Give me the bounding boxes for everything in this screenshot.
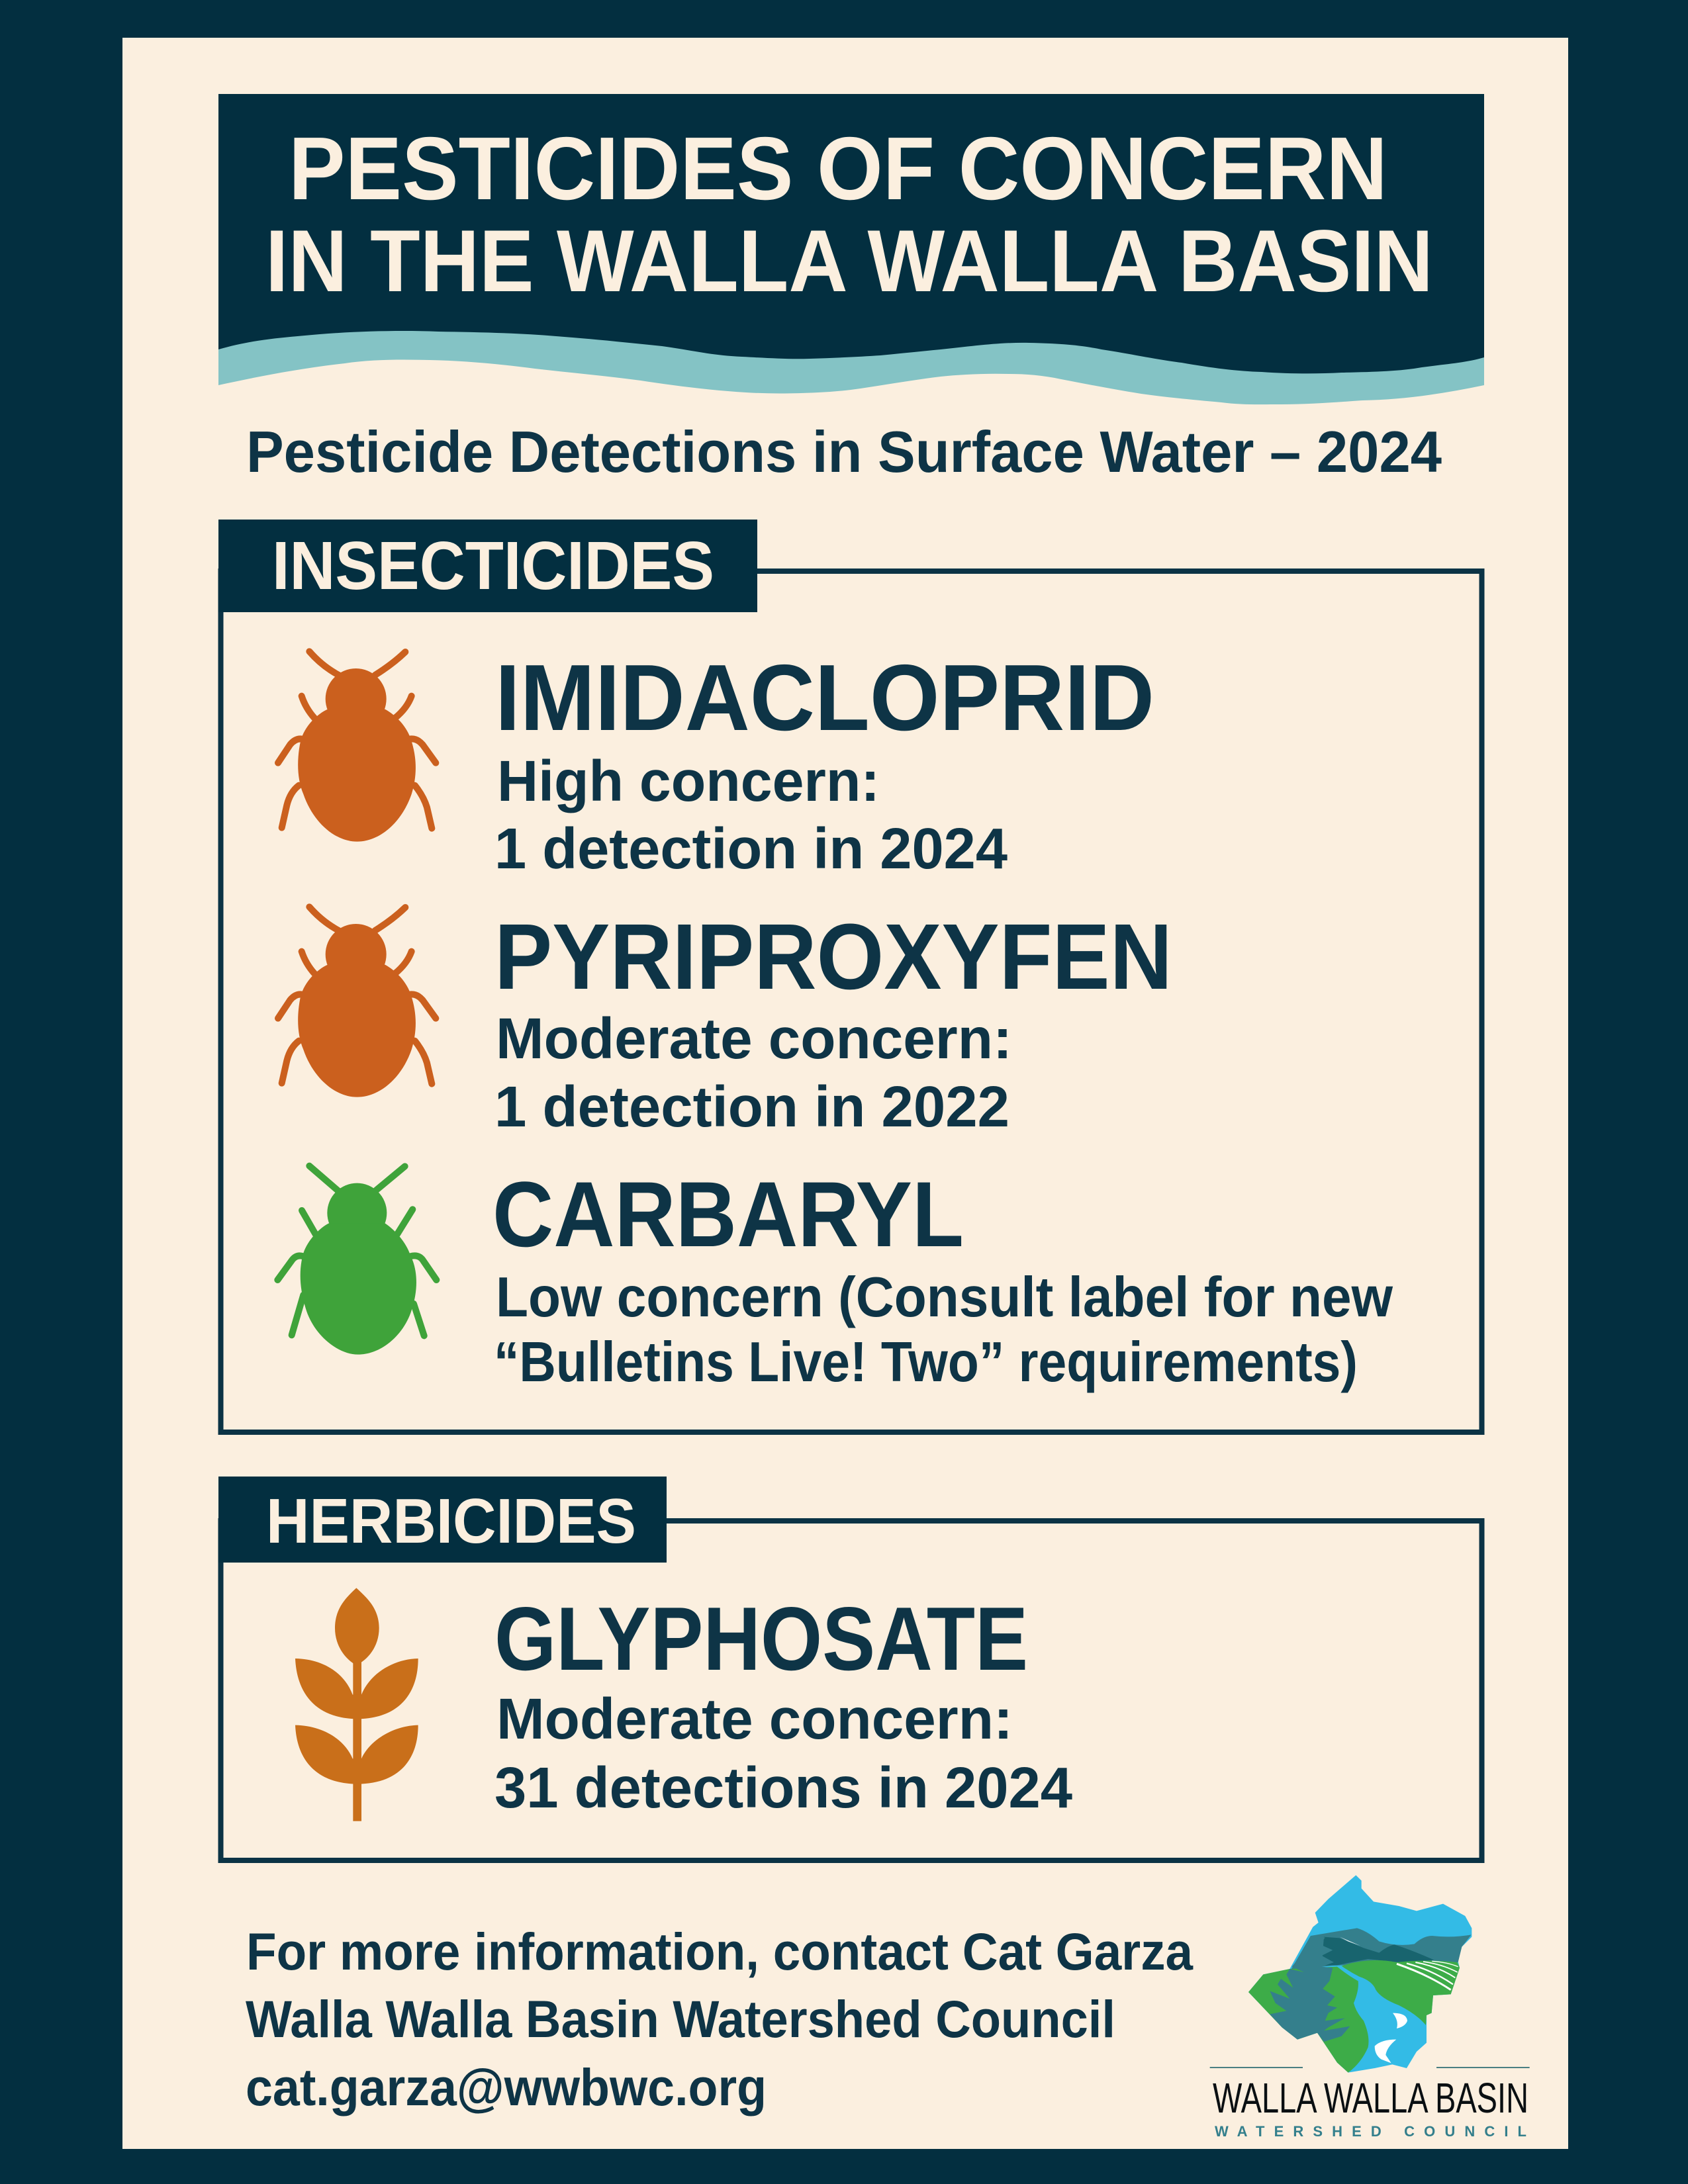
- text: carbaryl: [492, 1162, 1393, 1394]
- text: pyriproxyfen: [494, 904, 1172, 1139]
- contact block: For more information, contact Cat Garza: [246, 1922, 1194, 1981]
- title line 1: PESTICIDES OF CONCERN: [289, 118, 1387, 218]
- panel: herbicides: [218, 1477, 1481, 1860]
- text: pyriproxyfen: Moderate concern:: [496, 1007, 1012, 1071]
- logo tagline: WATERSHED COUNCIL: [1215, 2123, 1526, 2140]
- icon: orange bug, imidacloprid: [278, 651, 436, 842]
- wave: teal water stripe: [218, 318, 1484, 404]
- contact block: cat.garza@wwbwc.org: [246, 2058, 767, 2116]
- text: imidacloprid: High concern:: [497, 749, 880, 813]
- text: imidacloprid: [494, 645, 1154, 881]
- text: carbaryl: Low concern (Consult label for new: [496, 1266, 1393, 1329]
- title banner: [218, 94, 1484, 404]
- icon: orange bug, pyriproxyfen: [278, 907, 436, 1097]
- text: carbaryl: CARBARYL: [492, 1162, 964, 1266]
- contact block: [246, 1922, 1194, 2116]
- icon: green bug, carbaryl: [277, 1166, 436, 1355]
- panel: insecticides: [218, 520, 1481, 1432]
- text: glyphosate: 31 detections in 2024: [494, 1756, 1072, 1820]
- logo: Walla Walla Basin Watershed Council: [1210, 1875, 1530, 2140]
- heading tab: insecticides: INSECTICIDES: [272, 527, 714, 604]
- title line 2: IN THE WALLA WALLA BASIN: [265, 212, 1433, 310]
- text: carbaryl: “Bulletins Live! Two” requirements): [494, 1331, 1358, 1394]
- banner background: [218, 94, 1484, 373]
- text: imidacloprid: IMIDACLOPRID: [495, 645, 1154, 751]
- logo map mark: [1210, 1875, 1530, 2073]
- contact block: Walla Walla Basin Watershed Council: [246, 1989, 1115, 2048]
- icon: plant: [295, 1588, 418, 1821]
- subtitle: Pesticide Detections in Surface Water – 2024: [246, 419, 1442, 484]
- heading tab: herbicides: HERBICIDES: [266, 1486, 636, 1557]
- text: pyriproxyfen: PYRIPROXYFEN: [494, 904, 1172, 1009]
- text: glyphosate: Moderate concern:: [496, 1687, 1013, 1751]
- text: imidacloprid: 1 detection in 2024: [494, 817, 1008, 881]
- text: pyriproxyfen: 1 detection in 2022: [494, 1075, 1009, 1139]
- text: glyphosate: GLYPHOSATE: [494, 1588, 1028, 1689]
- logo wordmark: WALLA WALLA BASIN: [1213, 2074, 1528, 2122]
- text: glyphosate: [494, 1588, 1072, 1820]
